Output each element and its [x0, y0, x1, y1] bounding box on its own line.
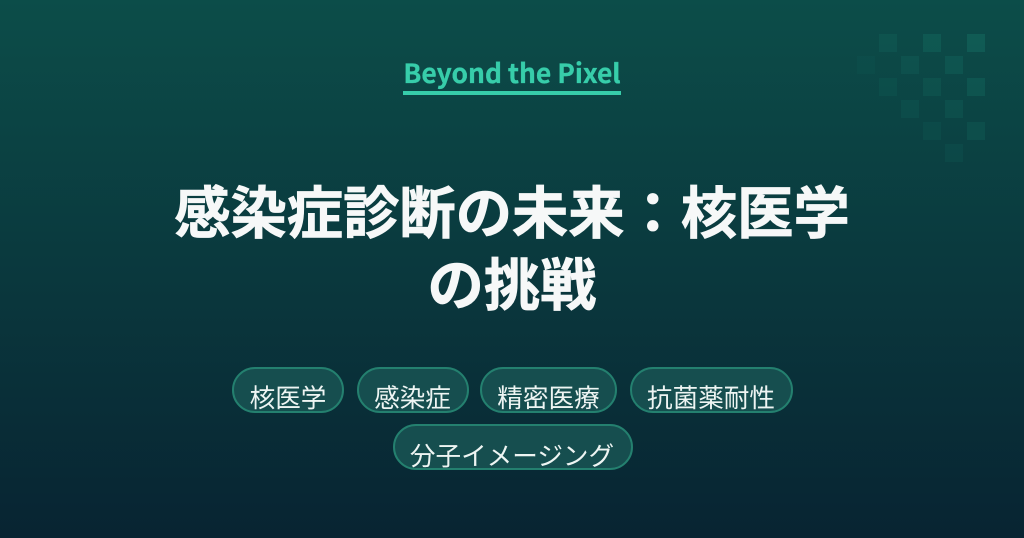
tag: 分子イメージング: [393, 424, 633, 470]
tag: 感染症: 感染症: [374, 378, 451, 415]
tag: 精密医療: 精密医療: [497, 378, 600, 415]
tag: 抗菌薬耐性: 抗菌薬耐性: [647, 378, 775, 415]
tag: 感染症: [357, 367, 469, 412]
tag: 分子イメージング: 分子イメージング: [410, 436, 614, 473]
title: の挑戦: [428, 241, 596, 322]
brand heading with underline: Beyond the Pixel: [403, 52, 621, 91]
tag: 核医学: [232, 367, 344, 412]
tag: 抗菌薬耐性: [630, 367, 793, 412]
title: [174, 169, 850, 322]
decorative pixel grid icon: [879, 34, 985, 140]
tag: 核医学: 核医学: [250, 378, 326, 415]
title: 感染症診断の未来：核医学: [174, 169, 850, 250]
tag: 精密医療: [480, 367, 617, 412]
